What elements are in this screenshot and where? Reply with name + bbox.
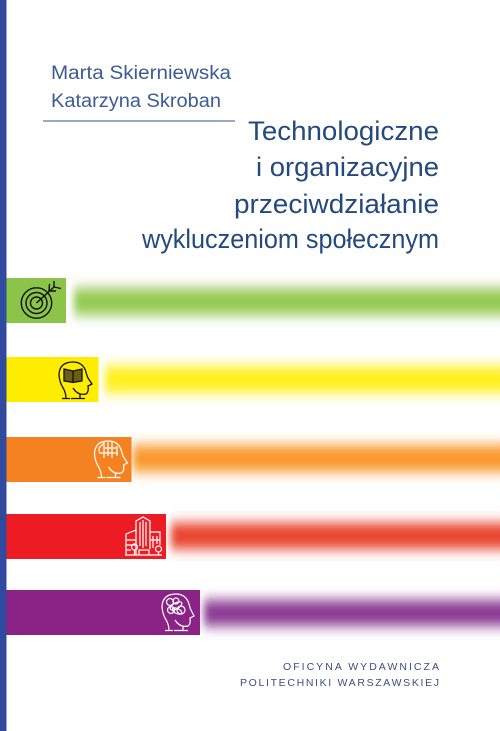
orange block (6, 437, 132, 482)
author names: Katarzyna Skroban (51, 91, 221, 112)
red block (6, 514, 166, 559)
title: przeciwdziałanie (234, 189, 439, 219)
icon: head with tangled thoughts (162, 594, 194, 630)
blue spine stripe (0, 0, 6, 731)
green block (6, 278, 66, 323)
title: Technologiczne (248, 116, 439, 146)
purple block (6, 590, 200, 635)
publisher name: POLITECHNIKI WARSZAWSKIEJ (240, 677, 439, 689)
gradient band: purple (204, 600, 500, 626)
icon: head with book (59, 362, 92, 398)
author divider line (43, 120, 235, 122)
gradient band: red (171, 523, 500, 549)
publisher name (240, 661, 439, 689)
icon: city buildings (125, 517, 162, 555)
author names: Marta Skierniewska (51, 63, 231, 84)
title: wykluczeniom społecznym (141, 224, 439, 254)
author names (51, 63, 231, 112)
gradient band: green (74, 288, 500, 315)
gradient band: yellow (105, 366, 500, 393)
icon: target with arrow (21, 281, 61, 318)
icon: head with brain (94, 441, 128, 478)
publisher name: OFICYNA WYDAWNICZA (283, 661, 439, 673)
yellow block (6, 357, 98, 402)
gradient band: orange (133, 445, 500, 472)
title (141, 116, 439, 254)
title: i organizacyjne (256, 152, 439, 182)
